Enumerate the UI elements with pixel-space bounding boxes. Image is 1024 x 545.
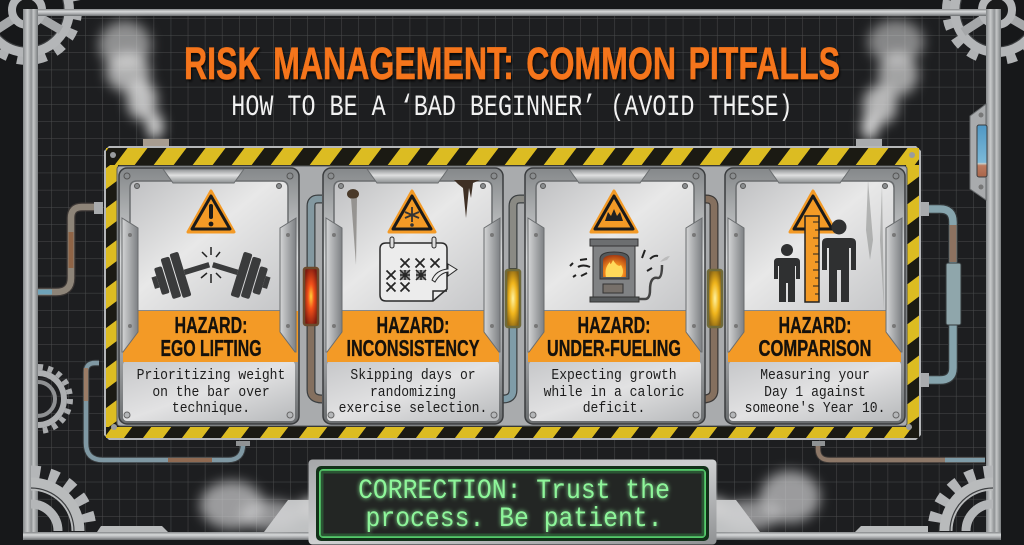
pipe: lower right (812, 441, 985, 460)
description: Skipping days or (350, 367, 476, 384)
description: Measuring your (760, 367, 870, 384)
gear bottom left (31, 472, 90, 531)
heading: HAZARD: (578, 312, 650, 338)
connecting pipe and yellow light 2 (703, 199, 722, 399)
correction text: process. Be patient. (365, 503, 663, 534)
heading: INCONSISTENCY (346, 335, 480, 361)
description: deficit. (583, 400, 645, 417)
heading: HAZARD: (174, 312, 248, 338)
orange hazard band (123, 311, 298, 362)
pipe: lower left (86, 363, 250, 460)
side supports (264, 500, 760, 532)
icon: furnace (570, 239, 670, 302)
steam: top right (862, 20, 924, 140)
description: while in a caloric (544, 384, 684, 401)
heading: HAZARD: (376, 312, 450, 338)
description: Expecting growth (551, 367, 677, 384)
hazard panel (104, 146, 921, 440)
warning icon: flame (591, 191, 637, 232)
gear top left (0, 0, 77, 60)
side gauge (970, 104, 987, 200)
card: ego lifting (119, 168, 299, 424)
pipe: right (921, 202, 961, 387)
rust stains (347, 180, 480, 265)
warning icon: burst (389, 191, 435, 232)
connecting pipe and yellow light 1 (503, 199, 524, 399)
gear top right (947, 0, 1024, 60)
icon: broken barbell (146, 244, 276, 305)
icon: ruler and people (774, 216, 856, 302)
card: under-fueling (525, 168, 705, 424)
pipe: upper left (38, 202, 103, 292)
connecting pipe and red light (304, 199, 322, 399)
gear left middle (38, 367, 70, 431)
card: inconsistency (323, 168, 503, 424)
description: technique. (172, 400, 250, 417)
heading: COMPARISON (758, 335, 872, 361)
description: Prioritizing weight (137, 367, 285, 384)
subtitle: HOW TO BE A ‘BAD BEGINNER’ (AVOID THESE) (231, 92, 793, 125)
card: comparison (725, 168, 905, 424)
description: Day 1 against (764, 384, 866, 401)
warning icon: exclamation (188, 191, 234, 232)
icon: calendar with crosses (380, 237, 457, 301)
correction display (308, 460, 716, 544)
hazard stripes (106, 148, 919, 438)
steam: top left (99, 21, 163, 139)
description: exercise selection. (339, 400, 487, 417)
warning icon: height arrow (790, 191, 836, 232)
steam: bottom right (700, 471, 820, 530)
gear bottom right (934, 472, 993, 531)
vent pipes (143, 139, 882, 146)
heading: EGO LIFTING (160, 335, 262, 361)
description: someone's Year 10. (745, 400, 885, 417)
description: on the bar over (152, 384, 270, 401)
description: randomizing (370, 384, 456, 401)
correction text: CORRECTION: Trust the (358, 475, 670, 506)
heading: HAZARD: (778, 312, 852, 338)
rust stains (866, 180, 884, 310)
steam: bottom left (200, 481, 326, 530)
heading: UNDER-FUELING (547, 335, 681, 361)
